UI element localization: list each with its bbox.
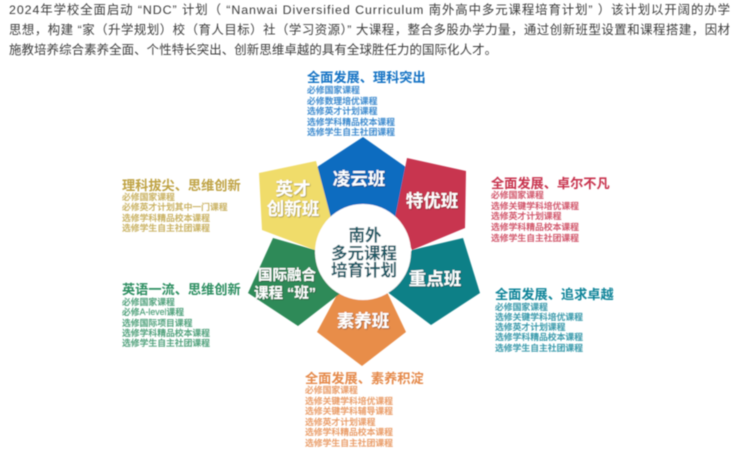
label group: 英才创新班 courses: 选修学生自主社团课程 [122,222,210,233]
petal: 素养班 [317,292,406,366]
center circle [315,204,411,300]
label group: 重点班 courses: 选修英才计划课程 [495,321,566,332]
label group: 特优班 courses: 选修学生自主社团课程 [491,232,579,243]
label group: 素养班 courses: 全面发展、素养积淀 [305,370,424,386]
petal: 凌云班 [314,137,410,218]
label group: 素养班 courses: 选修学科精品校本课程 [305,426,393,437]
intro paragraph: 2024年学校全面启动 “NDC” 计划（ “Nanwai Diversified Curriculum 南外高中多元课程培育计划” ）该计划以开阔的办学 [9,2,730,17]
label group: 重点班 courses: 全面发展、追求卓越 [495,286,614,302]
petal: 国际融合课程班 [248,238,342,326]
center circle: 南外 [348,226,382,245]
label group: 国际融合课程班 courses: 必修A-level课程 [122,306,184,317]
label group: 国际融合课程班 courses: 必修国家课程 [122,296,175,307]
label group: 英才创新班 courses [122,177,241,233]
petal: 素养班: 素养班 [337,311,389,331]
petal: 特优班: 特优班 [406,191,458,211]
label group: 凌云班 courses: 选修学生自主社团课程 [307,126,395,137]
label group: 素养班 courses: 选修学生自主社团课程 [305,437,393,448]
label group: 重点班 courses: 选修关键学科培优课程 [495,311,583,322]
label group: 国际融合课程班 courses: 选修学生自主社团课程 [122,337,210,348]
label group: 凌云班 courses [307,69,426,137]
label group: 特优班 courses: 选修英才计划课程 [491,210,562,221]
intro paragraph [9,2,730,57]
petal: 凌云班: 凌云班 [333,169,385,189]
petal: 国际融合课程班: 国际融合 [258,266,316,284]
petal: 重点班 [386,238,480,325]
label group: 凌云班 courses: 选修英才计划课程 [307,105,378,116]
label group: 英才创新班 courses: 必修国家课程 [122,191,175,202]
petal: 英才创新班 [259,161,331,250]
petal: 国际融合课程班: 课程 “班” [254,285,316,302]
label group: 重点班 courses: 选修学生自主社团课程 [495,342,583,353]
center circle: 培育计划 [331,260,397,280]
petal: 英才创新班: 英才 [276,179,310,199]
label group: 凌云班 courses: 必修国家课程 [307,84,360,95]
intro paragraph: 施教培养综合素养全面、个性特长突出、创新思维卓越的具有全球胜任力的国际化人才。 [9,42,497,57]
center circle: 多元课程 [331,243,397,263]
label group: 凌云班 courses: 全面发展、理科突出 [307,69,426,85]
petal: 特优班 [395,158,466,250]
label group: 重点班 courses: 选修学科精品校本课程 [495,331,583,342]
petal: 英才创新班: 创新班 [267,199,319,219]
label group: 英才创新班 courses: 必修英才计划其中一门课程 [122,201,228,212]
label group: 国际融合课程班 courses: 选修国际项目课程 [122,317,193,328]
label group: 英才创新班 courses: 选修学科精品校本课程 [122,212,210,223]
label group: 国际融合课程班 courses [122,281,241,348]
label group: 凌云班 courses: 必修数理培优课程 [307,95,378,106]
label group: 素养班 courses: 必修国家课程 [305,384,358,395]
label group: 英才创新班 courses: 理科拔尖、思维创新 [122,177,241,193]
label group: 重点班 courses [495,286,614,353]
label group: 素养班 courses: 选修关键学科培优课程 [305,395,393,406]
label group: 素养班 courses: 选修英才计划课程 [305,416,376,427]
petal: 重点班: 重点班 [409,269,461,289]
label group: 凌云班 courses: 选修学科精品校本课程 [307,116,395,127]
label group: 素养班 courses: 选修关键学科辅导课程 [305,405,393,416]
label group: 特优班 courses: 全面发展、卓尔不凡 [491,175,610,191]
label group: 特优班 courses: 选修关键学科培优课程 [491,200,579,211]
label group: 特优班 courses: 选修学科精品校本课程 [491,221,579,232]
intro paragraph: 思想，构建 “家（升学规划）校（育人目标）社（学习资源）” 大课程，整合多股办学力量，通过创新班型设置和课程搭建，因材 [9,22,730,37]
label group: 重点班 courses: 必修国家课程 [495,301,548,312]
label group: 国际融合课程班 courses: 英语一流、思维创新 [122,281,241,297]
hexagon diagram [248,137,480,366]
label group: 素养班 courses [305,370,424,448]
label group: 特优班 courses [491,175,610,243]
label group: 国际融合课程班 courses: 选修学科精品校本课程 [122,327,210,338]
label group: 特优班 courses: 必修国家课程 [491,189,544,200]
